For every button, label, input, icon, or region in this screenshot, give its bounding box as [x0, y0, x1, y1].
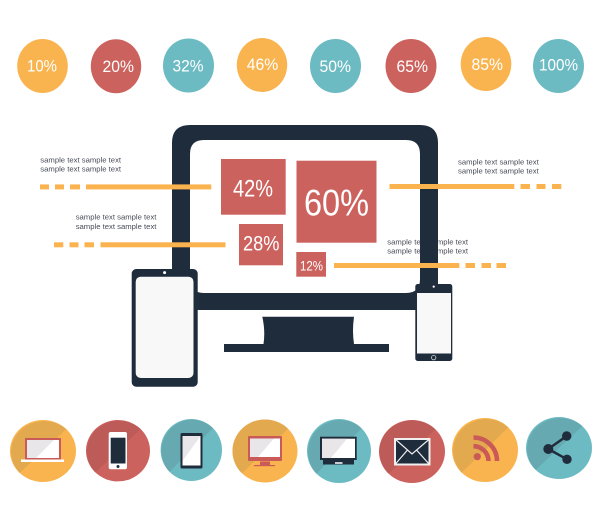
circle: 32% [163, 38, 214, 92]
tablet [132, 269, 198, 387]
tile: 28% [239, 224, 283, 265]
sample text block: lower right: sample text sample text [387, 246, 469, 256]
icon: notebook screen [307, 419, 371, 483]
circle: 20%: 20% [102, 57, 134, 76]
leader line: lower left [54, 242, 226, 247]
sample text block: lower left: sample text sample text [76, 222, 157, 231]
circle: 65%: 65% [396, 57, 428, 76]
monitor [172, 125, 438, 352]
sample text block: lower left [76, 213, 157, 231]
sample text block: upper right: sample text sample text [458, 166, 540, 176]
icon: smartphone [86, 420, 150, 481]
tile: 28%: 28% [243, 233, 280, 256]
circle: 85%: 85% [472, 55, 503, 74]
circle: 50%: 50% [320, 57, 351, 76]
sample text block: lower right [387, 237, 469, 256]
tile: 60%: 60% [304, 183, 369, 224]
leader line: upper left [40, 184, 211, 189]
sample text block: upper left [40, 156, 122, 174]
circle: 50% [310, 39, 361, 93]
tile: 12% [296, 252, 326, 277]
tile: 42%: 42% [233, 176, 273, 203]
tile: 12%: 12% [300, 258, 323, 274]
circle: 65% [386, 39, 436, 93]
sample text block: upper right: sample text sample text [458, 157, 540, 166]
sample text block: upper left: sample text sample text [40, 165, 122, 174]
circle: 10%: 10% [27, 57, 57, 76]
tile: 42% [221, 159, 286, 215]
sample text block: lower right: sample text sample text [387, 237, 469, 246]
circle: 85% [461, 37, 511, 91]
icon: tablet [161, 419, 222, 481]
circle: 20% [91, 39, 141, 93]
circle: 100% [533, 39, 584, 93]
percentage circles row [17, 37, 584, 93]
icon: envelope [379, 420, 445, 483]
circle: 100%: 100% [539, 56, 578, 75]
icon: laptop [10, 420, 76, 482]
icon: desktop monitor [232, 419, 298, 482]
circle: 32%: 32% [172, 57, 204, 76]
icon: share [526, 417, 592, 479]
leader line: upper right [390, 184, 561, 189]
circle: 46%: 46% [247, 55, 278, 74]
icon circles row [10, 417, 592, 483]
circle: 10% [17, 39, 68, 93]
icon: RSS feed [452, 418, 518, 482]
phone [415, 284, 452, 361]
tile: 60% [296, 161, 376, 243]
sample text block: upper left: sample text sample text [40, 156, 122, 164]
leader line: lower right [334, 263, 506, 268]
sample text block: upper right [458, 157, 540, 176]
circle: 46% [237, 38, 287, 92]
sample text block: lower left: sample text sample text [76, 213, 157, 222]
